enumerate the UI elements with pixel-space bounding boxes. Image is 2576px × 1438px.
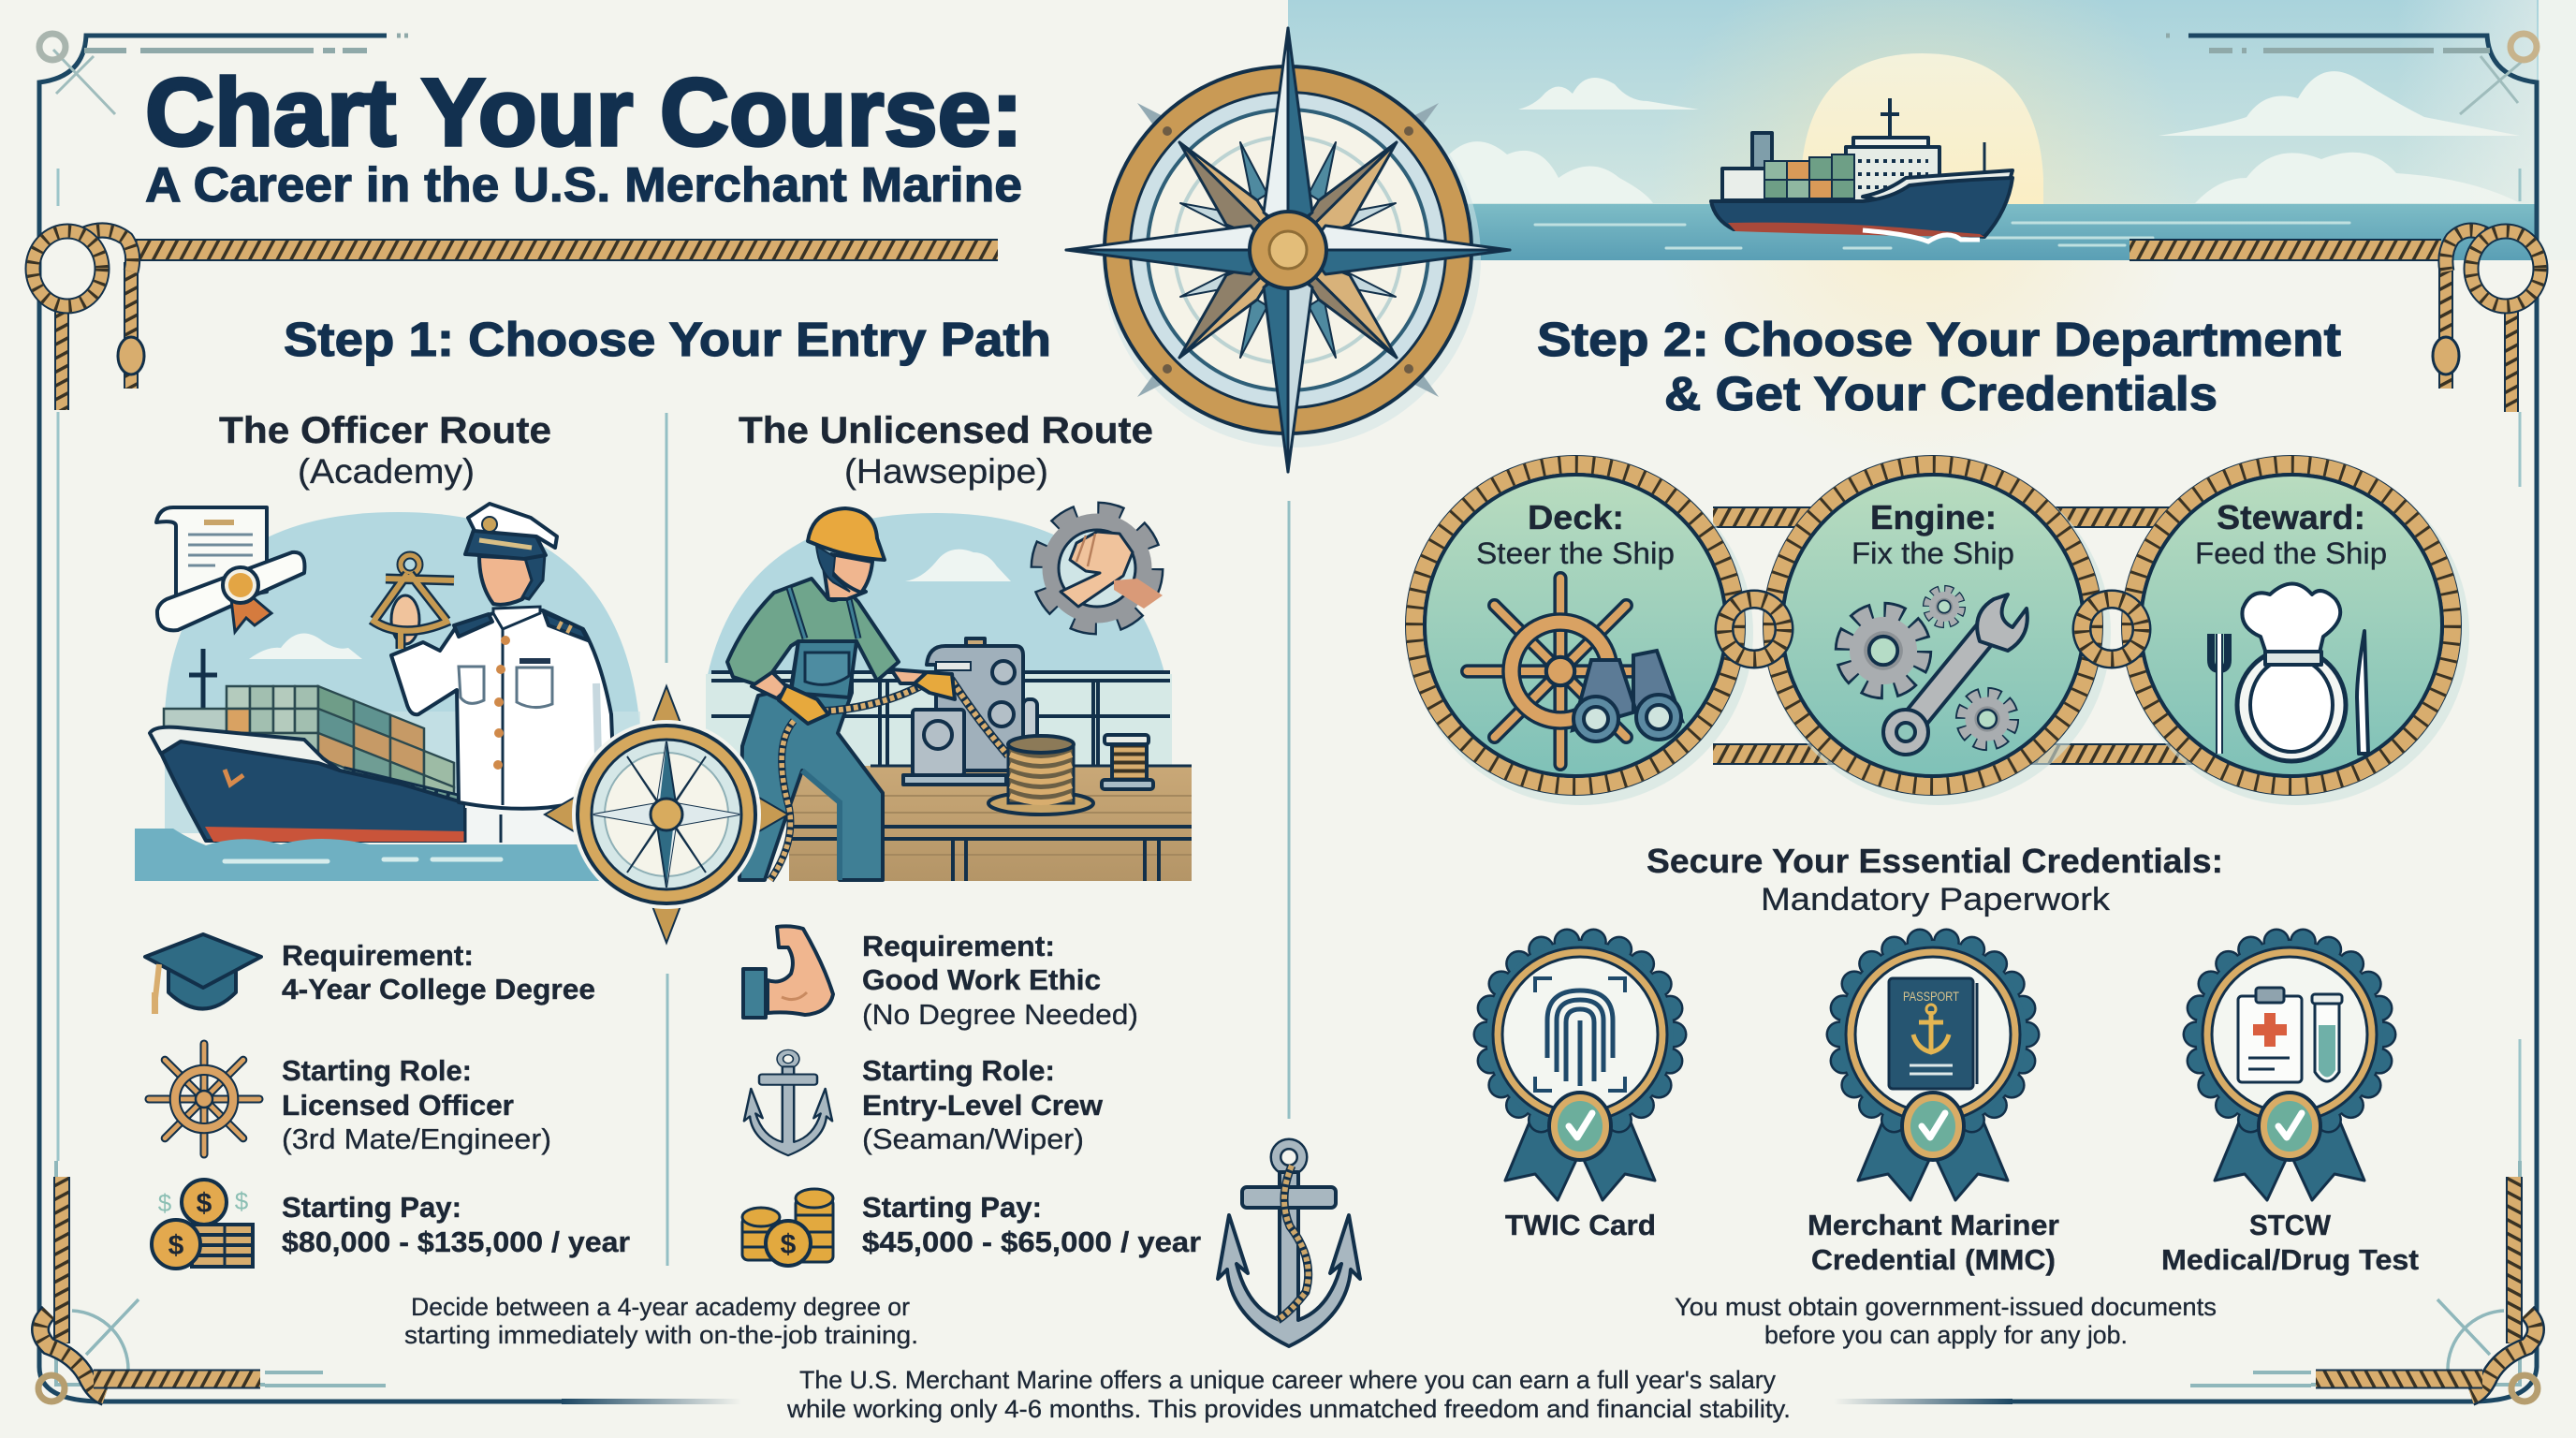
compass: large center [1066, 28, 1510, 472]
railing [711, 672, 1170, 768]
figure: officer [391, 504, 615, 844]
officer route heading: The Officer Route [219, 410, 551, 451]
list: officer route facts [145, 934, 630, 1269]
thin star points [1180, 142, 1396, 358]
requirement text [282, 939, 595, 1005]
caption: step 2 summary: You must obtain government-issued documents [1675, 1293, 2217, 1321]
icon: fingerprint [1535, 978, 1625, 1091]
icon: diploma scroll [156, 507, 304, 632]
icon: gold coins: $ [168, 1230, 184, 1261]
icon: coin stacks: $ [781, 1229, 797, 1260]
clouds [1444, 71, 2520, 203]
requirement text: Requirement: [282, 939, 474, 972]
icon: large anchor with rope [1218, 1144, 1360, 1346]
icon: anchor [744, 1052, 832, 1155]
unlicensed route heading: (Hawsepipe) [844, 452, 1048, 491]
caption: step 1 summary: Decide between a 4-year academy degree or [411, 1293, 910, 1321]
label: Credential (MMC) [1811, 1243, 2056, 1276]
icon: gold coins [152, 1180, 253, 1269]
department: engine [1763, 455, 2111, 805]
icon: sextant [372, 555, 454, 649]
main title [145, 59, 1023, 213]
department: deck: Deck: [1528, 498, 1624, 536]
label: Medical/Drug Test [2161, 1243, 2419, 1276]
starting pay text: Starting Pay: [282, 1191, 461, 1224]
department: engine: Engine: [1870, 498, 1997, 536]
requirement text: Requirement: [862, 930, 1055, 962]
panel: departments [1405, 455, 2469, 805]
dividers [666, 413, 1289, 1266]
starting pay text: $45,000 - $65,000 / year [862, 1225, 1201, 1258]
starting role text: Starting Role: [862, 1054, 1055, 1087]
credentials heading: Mandatory Paperwork [1761, 882, 2111, 917]
step 1 heading: Step 1: Choose Your Entry Path [284, 313, 1051, 366]
department: deck: Steer the Ship [1476, 536, 1675, 570]
label: STCW [2249, 1209, 2332, 1241]
officer route heading [219, 410, 551, 491]
requirement text: 4-Year College Degree [282, 973, 595, 1005]
starting role text: Starting Role: [282, 1054, 472, 1087]
credentials heading: Secure Your Essential Credentials: [1647, 842, 2223, 880]
icon: gear with handshake [1043, 514, 1163, 623]
icon: gears and wrench [1846, 590, 2027, 755]
icon: winch machine [903, 638, 1037, 785]
starting pay text [862, 1191, 1201, 1258]
caption: step 2 summary [1675, 1293, 2217, 1349]
caption: step 2 summary: before you can apply for any job. [1764, 1321, 2128, 1349]
icon: passport [1889, 978, 1977, 1089]
caption: overall summary [786, 1366, 1791, 1423]
icon: graduation cap [145, 934, 261, 1014]
unlicensed route heading [739, 410, 1153, 491]
starting role text [862, 1054, 1104, 1155]
step 2 heading: & Get Your Credentials [1664, 367, 2217, 420]
panel: sky and sea header scene [1288, 0, 2576, 468]
icon: gold coins: $ [197, 1188, 212, 1219]
rope: bottom right corner [2190, 1161, 2538, 1401]
badge: merchant mariner credential [1808, 941, 2059, 1276]
label: Merchant Mariner [1808, 1209, 2059, 1241]
starting role text: (Seaman/Wiper) [862, 1123, 1084, 1155]
starting role text [282, 1054, 551, 1155]
icon: coiled rope [988, 736, 1093, 814]
icon: clipboard and test tube [2238, 988, 2342, 1082]
department: steward [2121, 455, 2469, 805]
starting pay text: $80,000 - $135,000 / year [282, 1225, 630, 1258]
sea [1288, 204, 2537, 260]
icon: helm and binoculars [1468, 579, 1682, 764]
icon: cargo ship large [150, 649, 465, 842]
officer route heading: (Academy) [298, 452, 475, 491]
step 2 heading: Step 2: Choose Your Department [1537, 313, 2341, 366]
department: engine: Fix the Ship [1852, 536, 2014, 570]
sky dome [706, 513, 1172, 768]
caption: overall summary: while working only 4-6 months. This provides unmatched freedom and financial stability. [786, 1395, 1791, 1423]
illustration: officer route [135, 504, 640, 881]
step 2 heading [1537, 313, 2341, 420]
compass: small center medallion [545, 686, 788, 943]
caption: step 1 summary [404, 1293, 918, 1349]
badge: TWIC card: TWIC Card [1505, 1209, 1656, 1241]
diagonal star points [1179, 142, 1397, 358]
credentials heading [1647, 842, 2223, 917]
department: steward: Feed the Ship [2195, 536, 2387, 570]
icon: flexed arm [743, 926, 833, 1018]
unlicensed route heading: The Unlicensed Route [739, 410, 1153, 451]
starting pay text [282, 1191, 630, 1258]
rope: top right with knot [2130, 230, 2540, 412]
requirement text: (No Degree Needed) [862, 998, 1138, 1031]
sea water [135, 829, 599, 881]
label [1808, 1209, 2059, 1276]
connecting ropes [1713, 506, 2275, 765]
icon: coin stacks [742, 1189, 833, 1266]
icon: bollard [1102, 735, 1153, 789]
main title: Chart Your Course: [145, 59, 1023, 166]
sky dome [165, 512, 640, 833]
sun [1801, 53, 2043, 204]
subtitle: A Career in the U.S. Merchant Marine [145, 158, 1022, 213]
ship in header [1711, 98, 2012, 242]
main star points [1066, 28, 1510, 472]
starting role text: Licensed Officer [282, 1089, 514, 1122]
list: unlicensed route facts [742, 926, 1201, 1266]
caption: step 1 summary: starting immediately with on-the-job training. [404, 1321, 918, 1349]
department: steward: Steward: [2217, 498, 2365, 536]
deck [789, 766, 1192, 881]
icon: gold coins: $ [158, 1189, 172, 1217]
starting pay text: Starting Pay: [862, 1191, 1042, 1224]
icon: ship wheel [149, 1044, 259, 1154]
rope knots [1724, 599, 2142, 659]
department: deck [1405, 455, 1753, 805]
starting role text: Entry-Level Crew [862, 1089, 1104, 1122]
illustration: unlicensed route [706, 508, 1192, 881]
icon: gold coins: $ [235, 1187, 249, 1215]
figure: worker [727, 508, 1008, 880]
requirement text [862, 930, 1138, 1031]
requirement text: Good Work Ethic [862, 963, 1101, 996]
rope: top left with knot [33, 230, 998, 410]
rope: bottom left corner [38, 1161, 386, 1401]
badge: STCW medical test [2161, 941, 2419, 1276]
badge: TWIC card [1486, 941, 1674, 1241]
caption: overall summary: The U.S. Merchant Marine offers a unique career where you can earn a full year's salary [799, 1366, 1776, 1394]
icon: passport: PASSPORT [1903, 989, 1959, 1004]
icon: plate, chef hat and cutlery [2211, 584, 2368, 761]
label [2161, 1209, 2419, 1276]
starting role text: (3rd Mate/Engineer) [282, 1123, 551, 1155]
